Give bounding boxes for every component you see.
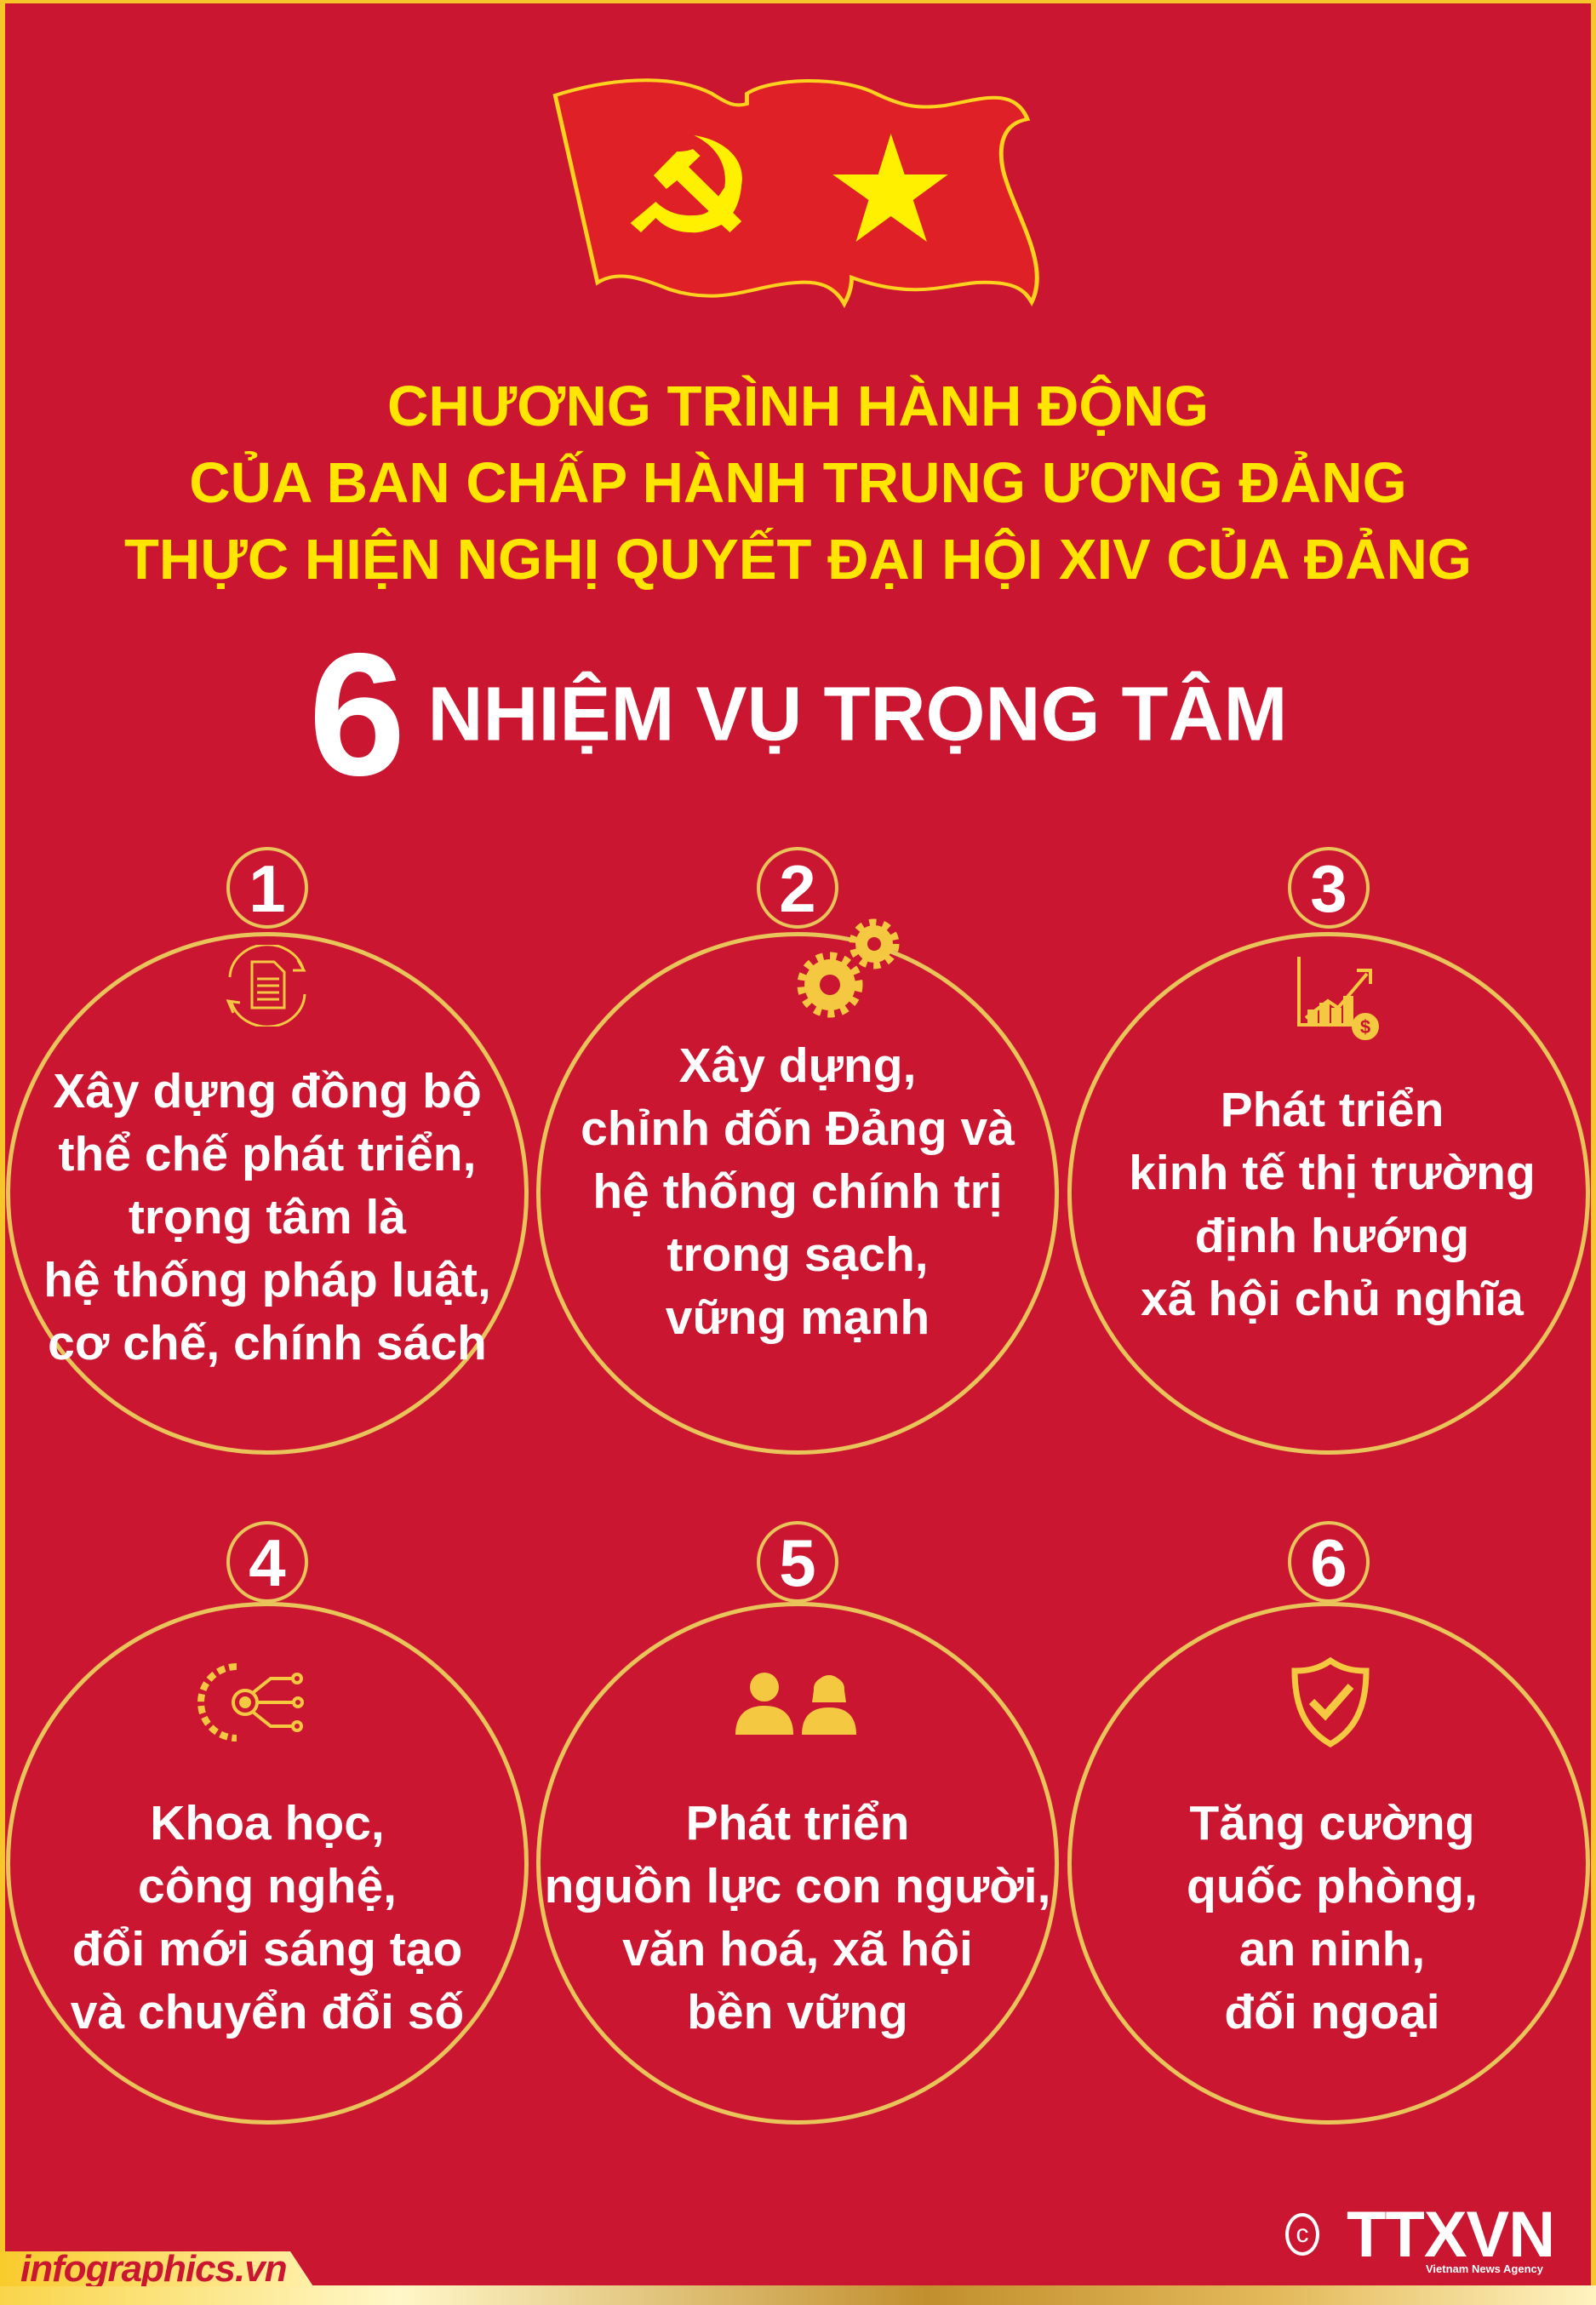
panel: task 3 [1067,847,1590,1455]
panel: task 2: trong sạch, [666,1227,929,1282]
panel: task 1: hệ thống pháp luật, [43,1253,491,1307]
panel: task 3: 3 [1310,851,1347,926]
panel: task 5: bền vững [687,1985,908,2039]
panel: task 6: 6 [1310,1525,1347,1600]
panel: task 1: trọng tâm là [129,1190,406,1244]
panel: task 2 [536,847,1059,1455]
icon: shield check [1292,1656,1369,1747]
title: CỦA BAN CHẤP HÀNH TRUNG ƯƠNG ĐẢNG [189,451,1407,515]
panel: task 5: Phát triển [686,1796,909,1850]
panel: task 3: Phát triển [1221,1083,1444,1137]
panel: task 2: vững mạnh [666,1290,930,1345]
panel: task 2: hệ thống chính trị [592,1164,1003,1219]
icon: growth chart: $ [1360,1016,1370,1038]
icon: document refresh [226,945,306,1027]
panel: task 6: đối ngoại [1224,1985,1440,2039]
icon: people [735,1673,856,1735]
flag [553,78,1039,308]
logo: TTXVN: c [1296,2220,1309,2248]
panel: task 1: thể chế phát triển, [59,1127,476,1181]
panel: task 2: 2 [779,851,816,926]
panel: task 1 [6,847,529,1455]
panel: task 5: 5 [779,1525,816,1600]
panel: task 6: Tăng cường [1189,1796,1475,1850]
panel: task 6: quốc phòng, [1187,1859,1478,1913]
panel: task 1: 1 [249,851,286,926]
title: THỰC HIỆN NGHỊ QUYẾT ĐẠI HỘI XIV CỦA ĐẢNG [124,528,1472,592]
logo: TTXVN: TTXVN [1347,2199,1554,2271]
panel: task 5: văn hoá, xã hội [622,1922,973,1976]
panel: task 4 [6,1521,529,2125]
panel: task 1: cơ chế, chính sách [48,1316,487,1370]
icon: tech gear circuit [197,1663,304,1742]
bottom gold band [0,2285,1596,2305]
border frame [0,0,5,2305]
panel: task 2: Xây dựng, [679,1038,916,1093]
subtitle: 6 NHIỆM VỤ TRỌNG TÂM [309,617,1287,812]
logo: TTXVN: Vietnam News Agency [1426,2262,1543,2275]
icon: star [832,134,948,242]
icon: hammer and sickle [631,135,742,232]
icon: growth chart [1297,957,1379,1040]
panel: task 6: an ninh, [1239,1922,1425,1976]
panel: task 4: đổi mới sáng tạo [72,1922,462,1976]
panel: task 1: Xây dựng đồng bộ [53,1064,482,1118]
panel: task 4: 4 [249,1525,286,1600]
panel: task 2: chỉnh đốn Đảng và [581,1101,1015,1156]
panel: task 4: công nghệ, [138,1859,397,1913]
panel: task 6 [1067,1521,1590,2125]
panel: task 4: và chuyển đổi số [71,1985,464,2039]
icon: gears [797,919,899,1018]
title [124,375,1472,592]
panel: task 3: kinh tế thị trường [1129,1146,1536,1200]
panel: task 3: xã hội chủ nghĩa [1141,1272,1524,1326]
panel: task 5: nguồn lực con người, [545,1859,1050,1913]
footer: infographics.vn badge: infographics.vn [20,2248,287,2290]
panel: task 5 [536,1521,1059,2125]
panel: task 3: định hướng [1195,1209,1469,1263]
panel: task 4: Khoa học, [150,1796,385,1850]
title: CHƯƠNG TRÌNH HÀNH ĐỘNG [387,375,1209,438]
